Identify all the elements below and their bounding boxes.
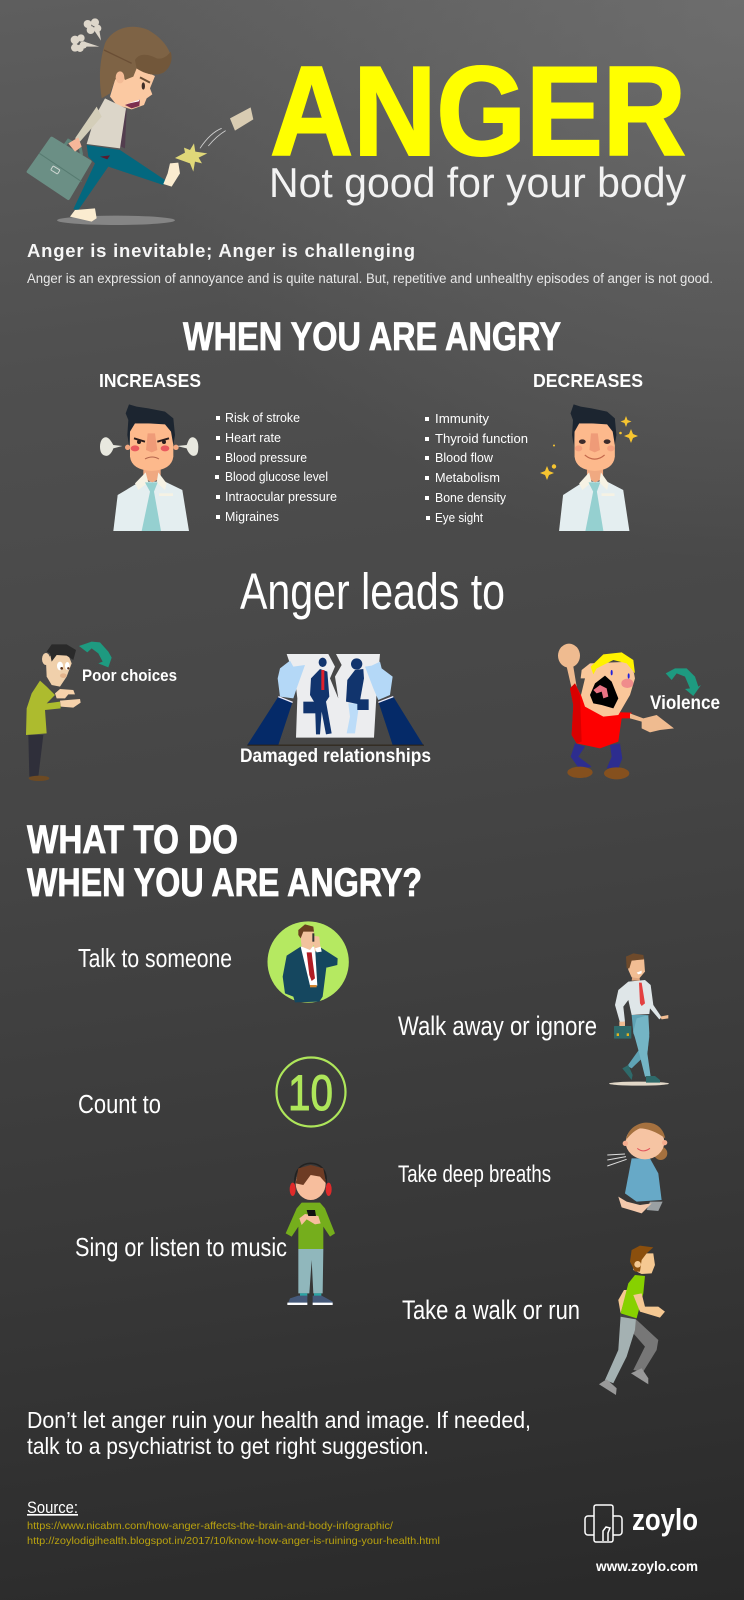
panel: increases <box>99 371 337 531</box>
icon: screaming boy in red shirt <box>558 644 674 779</box>
label: Talk to someone <box>78 943 232 973</box>
icon: number ten in circle: 10 <box>288 1065 333 1121</box>
closing advice: talk to a psychiatrist to get right suggestion. <box>27 1433 429 1459</box>
intro heading: Anger is inevitable; Anger is challenging <box>27 240 415 261</box>
icon: angry man with steam <box>100 404 198 531</box>
list: decreases: Bone density <box>435 490 507 505</box>
item: sing or listen to music <box>75 1163 335 1305</box>
list: increases: Blood glucose level <box>225 469 328 484</box>
sources: https://www.nicabm.com/how-anger-affects-the-brain-and-body-infographic/ <box>27 1520 393 1532</box>
icon: meditating woman <box>607 1123 667 1213</box>
icon: running man <box>599 1246 665 1395</box>
list: decreases: Metabolism <box>435 470 500 485</box>
list: decreases: Eye sight <box>435 510 483 525</box>
label: damaged relationships: Damaged relationships <box>240 746 431 767</box>
panel: decreases <box>425 371 643 531</box>
list: decreases: Blood flow <box>435 450 494 465</box>
sources <box>27 1499 440 1547</box>
panel: poor choices <box>26 642 177 781</box>
icon: boy with headphones <box>286 1163 335 1305</box>
item: talk to someone <box>78 921 349 1003</box>
heading: anger leads to: Anger leads to <box>240 563 505 620</box>
icon: man looking at his hands <box>26 644 81 781</box>
website: www.zoylo.com <box>595 1559 698 1574</box>
label: Count to <box>78 1091 161 1119</box>
label: Take deep breaths <box>398 1161 551 1188</box>
icon: number ten in circle <box>276 1058 346 1126</box>
sources: http://zoylodigihealth.blogspot.in/2017/10/know-how-anger-is-ruining-your-health.html <box>27 1535 440 1547</box>
icon: torn photo of a couple held by hands <box>247 654 424 746</box>
heading: what to do when you are angry <box>27 818 422 905</box>
list: decreases: Immunity <box>435 411 490 426</box>
list: increases: Intraocular pressure <box>225 489 337 504</box>
sources: Source: <box>27 1499 78 1517</box>
arrow: curved teal arrow <box>79 642 112 667</box>
panel: violence <box>558 644 720 779</box>
icon: walking man with briefcase <box>609 953 669 1086</box>
list: increases <box>215 410 337 524</box>
arrow: curved teal arrow <box>666 668 701 696</box>
icon: phone with hand <box>585 1505 622 1542</box>
list: decreases: Thyroid function <box>435 431 528 446</box>
item: take deep breaths <box>398 1123 667 1213</box>
icon: calm man with sparkles <box>540 404 638 531</box>
list: increases: Heart rate <box>225 430 281 445</box>
logo: zoylo <box>585 1502 698 1574</box>
closing advice: Don’t let anger ruin your health and image. If needed, <box>27 1407 531 1433</box>
item: count to 10 <box>78 1058 346 1126</box>
panel: damaged relationships <box>240 654 431 767</box>
label: Take a walk or run <box>402 1295 580 1325</box>
intro text: Anger is an expression of annoyance and is quite natural. But, repetitive and unhealthy episodes of anger is not good. <box>27 271 713 286</box>
closing advice <box>27 1407 531 1459</box>
wordmark: zoylo <box>632 1502 698 1537</box>
label: poor choices: Poor choices <box>82 666 177 685</box>
title: ANGER <box>270 40 686 182</box>
label: Sing or listen to music <box>75 1232 287 1262</box>
heading: when you are angry: WHEN YOU ARE ANGRY <box>183 315 561 359</box>
item: take a walk or run <box>402 1246 665 1395</box>
subtitle: Not good for your body <box>269 159 686 206</box>
heading: decreases: DECREASES <box>533 371 643 391</box>
list: increases: Blood pressure <box>225 450 307 465</box>
heading: what to do when you are angry: WHEN YOU ARE ANGRY? <box>27 861 422 905</box>
list: increases: Migraines <box>225 509 279 524</box>
item: walk away or ignore <box>398 953 669 1086</box>
list: increases: Risk of stroke <box>225 410 300 425</box>
heading: what to do when you are angry: WHAT TO DO <box>27 818 238 862</box>
label: violence: Violence <box>650 692 720 714</box>
heading: increases: INCREASES <box>99 371 201 391</box>
icon: man on the phone in green circle <box>267 921 349 1003</box>
icon: angry man kicking a stone <box>28 18 253 225</box>
label: Walk away or ignore <box>398 1011 597 1041</box>
list: decreases <box>425 411 528 525</box>
